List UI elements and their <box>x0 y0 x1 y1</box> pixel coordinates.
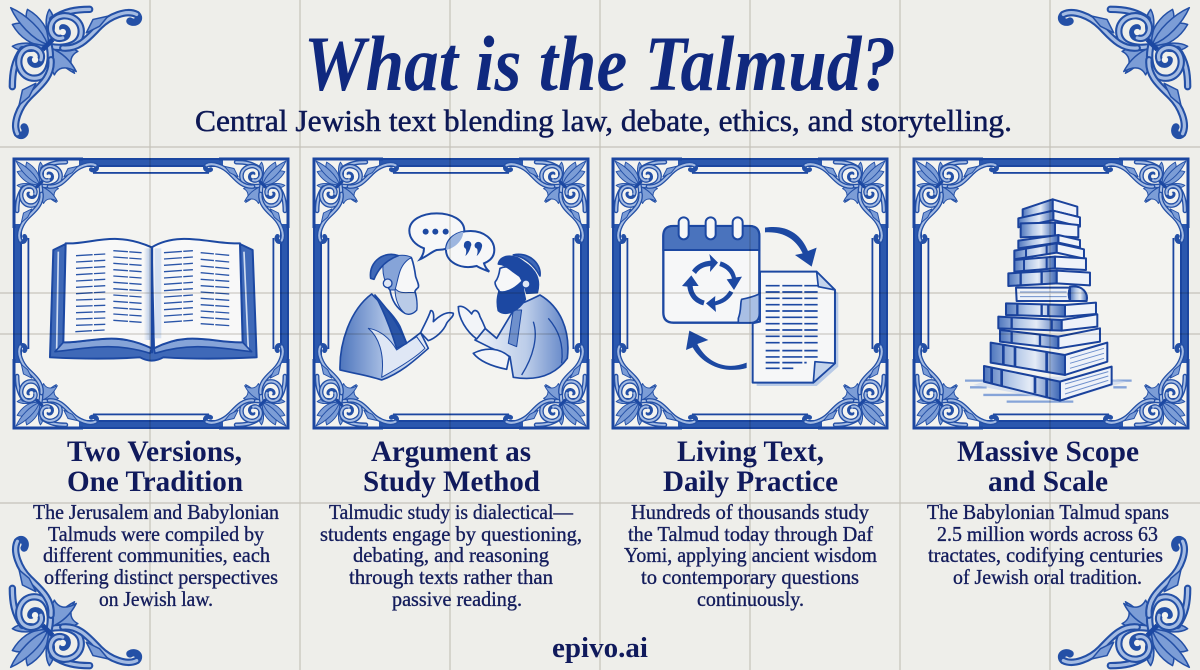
text: two versions: on Jewish law. <box>99 587 213 611</box>
text: two versions: different communities, each <box>43 543 270 567</box>
panel: argument frame <box>314 159 588 428</box>
arrow: document to calendar <box>686 331 747 370</box>
panel: living text frame <box>613 159 887 428</box>
calendar <box>663 217 759 323</box>
book 10 <box>1018 235 1080 248</box>
corner ornament: bottom right <box>1062 540 1189 667</box>
text: massive scope: of Jewish oral tradition. <box>953 565 1142 589</box>
cycle arrows <box>682 254 742 312</box>
figure: younger scholar <box>458 254 568 378</box>
text: living text: the Talmud today through Daf <box>628 522 873 546</box>
book 3 <box>1000 328 1100 348</box>
book 13 <box>1023 199 1077 218</box>
heading: living text <box>663 435 838 498</box>
book 8 <box>1014 257 1086 272</box>
text: two versions: offering distinct perspectives <box>44 565 278 589</box>
text: living text <box>624 500 877 611</box>
corner ornament: top right <box>1062 8 1189 135</box>
text: argument: Talmudic study is dialectical— <box>329 500 574 524</box>
subtitle: Central Jewish text blending law, debate, ethics, and storytelling. <box>195 103 1012 138</box>
text: argument: through texts rather than <box>349 565 553 589</box>
book 9 <box>1014 243 1084 259</box>
arrow: calendar to document <box>765 227 817 267</box>
book 4 <box>998 314 1097 331</box>
heading: living text: Daily Practice <box>663 465 838 498</box>
document <box>753 272 838 386</box>
heading: massive scope: and Scale <box>988 465 1108 498</box>
text: two versions <box>33 500 279 611</box>
heading: argument <box>363 435 540 498</box>
text: massive scope: 2.5 million words across 63 <box>937 522 1158 546</box>
text: living text: to contemporary questions <box>641 565 859 589</box>
heading: massive scope: Massive Scope <box>957 435 1139 468</box>
heading: living text: Living Text, <box>677 435 824 468</box>
corner ornament: top left <box>11 8 138 135</box>
icon: open book <box>50 239 257 361</box>
heading: argument: Argument as <box>371 435 531 468</box>
text: argument: students engage by questioning, <box>320 522 582 546</box>
heading: two versions: Two Versions, <box>67 435 242 468</box>
icon: calendar and document cycle <box>663 217 838 386</box>
heading: two versions: One Tradition <box>67 465 243 498</box>
text: living text: Hundreds of thousands study <box>631 500 869 524</box>
panel: massive scope frame <box>914 159 1188 428</box>
speech bubble: ellipsis <box>409 213 464 259</box>
heading: massive scope <box>957 435 1139 498</box>
text: argument: debating, and reasoning <box>353 543 549 567</box>
text: massive scope: tractates, codifying centuries <box>928 543 1163 567</box>
icon: stack of books <box>965 199 1132 402</box>
book 7 <box>1008 271 1090 286</box>
book 1 <box>984 366 1112 401</box>
text: argument <box>320 500 582 611</box>
text: living text: Yomi, applying ancient wisdom <box>624 543 877 567</box>
text: massive scope <box>927 500 1169 589</box>
heading: argument: Study Method <box>363 465 540 498</box>
brand footer: epivo.ai <box>552 633 648 664</box>
heading: two versions <box>67 435 243 498</box>
text: massive scope: The Babylonian Talmud spans <box>927 500 1169 524</box>
icon: two scholars debating <box>340 213 568 380</box>
book 6 <box>1016 286 1087 301</box>
book 12 <box>1018 211 1080 227</box>
panel backgrounds <box>13 158 1189 429</box>
text: argument: passive reading. <box>392 587 522 611</box>
book 11 <box>1021 223 1078 237</box>
text: two versions: The Jerusalem and Babylonian <box>33 500 279 524</box>
corner ornament: bottom left <box>11 540 138 667</box>
book 2 <box>991 343 1107 375</box>
figure: older scholar <box>340 254 453 380</box>
text: living text: continuously. <box>697 587 804 611</box>
panel: two versions frame <box>14 159 288 428</box>
book 5 <box>1006 303 1096 317</box>
speech bubble: quote <box>446 231 494 272</box>
text: two versions: Talmuds were compiled by <box>48 522 264 546</box>
title: What is the Talmud? <box>304 20 896 107</box>
